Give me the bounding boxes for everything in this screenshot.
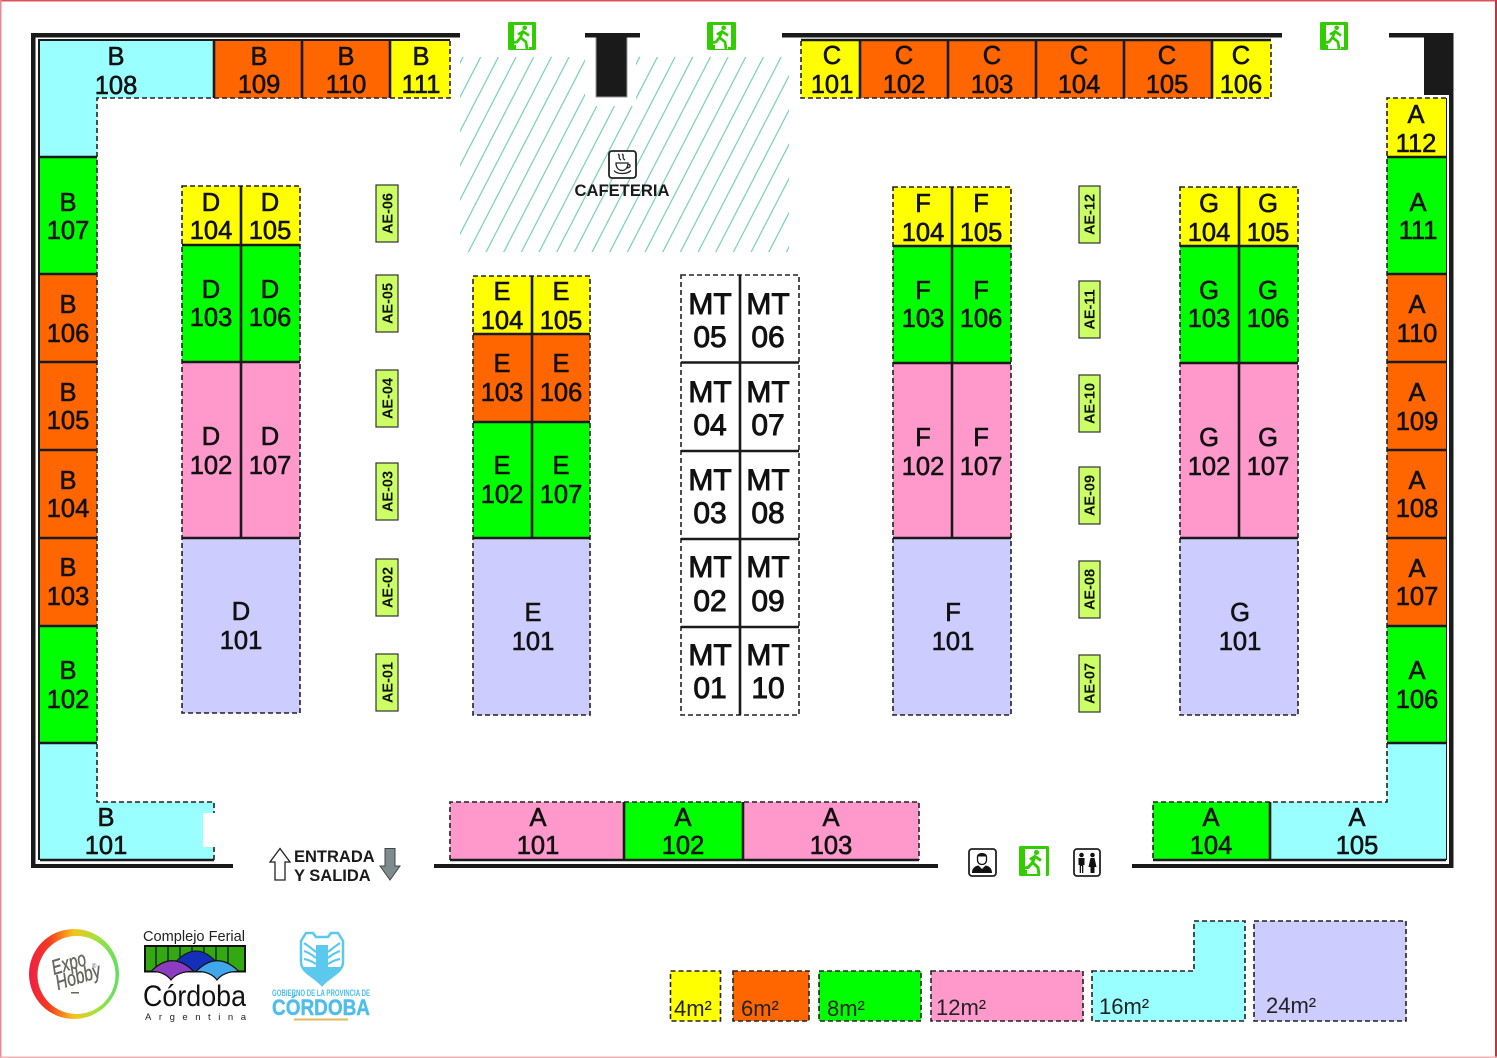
legend item 16m² [1092,921,1245,1021]
stall B104: B [59,467,77,495]
stalls MT 01 to MT 10: 03 [693,497,727,530]
stall E104: 104 [481,307,523,335]
stall B111 [390,41,450,99]
stall E105: 105 [540,307,582,335]
stall B107: B [59,189,77,217]
stall D104: D [202,189,220,217]
stalls MT 01 to MT 10: MT [688,639,732,672]
stand AE-10: AE-10 [1082,383,1098,424]
stall G102: G [1199,424,1219,452]
stall A101: 101 [517,832,559,860]
stall D101: D [232,598,250,626]
stall C101: C [823,42,841,70]
stall A111: 111 [1399,217,1437,245]
stall A102: A [674,804,692,832]
stall B103: 103 [47,583,89,611]
stand AE-02 [376,559,398,616]
legend item 4m² [670,971,720,1021]
stall A106: A [1408,657,1426,685]
stall C106: C [1232,42,1250,70]
stall F103: F [915,277,931,305]
stall B105 [40,362,97,450]
corner pillar [1424,33,1453,95]
stall C101: 101 [811,71,853,99]
stall B106: 106 [47,320,89,348]
label: cafeteria: CAFETERIA [575,181,669,200]
stalls MT 01 to MT 10: MT [746,376,790,409]
stalls MT 01 to MT 10: MT [746,464,790,497]
stall B102: B [59,657,77,685]
stall A109: A [1408,379,1426,407]
stand AE-12: AE-12 [1082,194,1098,235]
stall G106: 106 [1247,305,1289,333]
entrance label: ENTRADA [294,848,375,866]
logo: Gobierno de Córdoba [272,933,370,1020]
stand AE-01: AE-01 [380,662,396,703]
stall A101 [450,802,624,860]
stall G107 [1239,363,1298,538]
stalls MT 01 to MT 10: 05 [693,321,727,354]
stalls MT 01 to MT 10: MT [746,639,790,672]
stall C104 [1036,41,1124,99]
icon: down arrow [380,848,400,880]
stalls MT 01 to MT 10: 09 [751,585,785,618]
stall C103: C [983,42,1001,70]
stall D104: 104 [190,217,232,245]
stall A104: 104 [1190,832,1232,860]
stall F103 [893,246,952,363]
stall G107: 107 [1247,453,1289,481]
stall E102: 102 [481,481,523,509]
stall A108: A [1408,467,1426,495]
stall C106 [1212,41,1271,99]
stall B102 [40,626,97,743]
legend item 24m²: 24m² [1266,993,1316,1018]
stall B104: 104 [47,495,89,523]
stall G102: 102 [1188,453,1230,481]
entrance label: Y SALIDA [294,867,371,885]
stall B101: B [97,804,115,832]
stall D102 [182,362,241,538]
stalls MT 01 to MT 10: MT [688,376,732,409]
stall E103: E [493,350,511,378]
stall G104 [1180,187,1239,247]
logo: Gobierno de Córdoba: CÓRDOBA [272,995,370,1020]
stall C103: 103 [971,71,1013,99]
stall D104 [182,186,241,245]
stall E106: E [552,350,570,378]
stall F105: 105 [960,219,1002,247]
stalls MT 01 to MT 10: MT [688,464,732,497]
stand AE-10 [1079,375,1100,432]
stall F104 [893,187,952,247]
stall B109 [214,41,302,99]
stall F105 [952,187,1011,247]
stall A105 [1270,743,1446,860]
stalls MT 01 to MT 10: 08 [751,497,785,530]
stall A110 [1387,274,1446,362]
stall C106: 106 [1220,71,1262,99]
stall D107: D [261,423,279,451]
legend item 16m²: 16m² [1099,994,1149,1019]
stall B101 [40,743,214,860]
stall D102: 102 [190,452,232,480]
stall A112: 112 [1396,130,1436,158]
stall D106: D [261,276,279,304]
stall G106 [1239,246,1298,363]
logo: Complejo Ferial Córdoba: Complejo Ferial [143,928,245,945]
stand AE-09: AE-09 [1082,475,1098,516]
stall D106 [241,245,300,362]
stall E104 [473,276,532,335]
legend item 6m²: 6m² [741,996,779,1021]
stall C105: 105 [1146,71,1188,99]
stand AE-11 [1079,281,1100,338]
stall A106 [1387,626,1446,743]
stall A105: 105 [1336,832,1378,860]
block E outlines [473,276,590,715]
entrance and exit sign [270,848,400,885]
stall E103: 103 [481,379,523,407]
stall A104 [1153,802,1270,860]
stalls MT 01 to MT 10: MT [688,288,732,321]
entrance label [294,848,375,885]
stand AE-02: AE-02 [380,567,396,608]
stall G103: G [1199,277,1219,305]
stalls MT 01 to MT 10: 10 [751,672,785,705]
stall F102: 102 [902,453,944,481]
stall F104: 104 [902,219,944,247]
stall A103: 103 [810,832,852,860]
stalls MT 01 to MT 10: 01 [693,672,727,705]
stall A107: 107 [1396,583,1438,611]
stand AE-06 [376,185,398,242]
block G outlines [1180,187,1298,715]
stand AE-05: AE-05 [380,283,396,324]
stall F103: 103 [902,305,944,333]
stall G103: 103 [1188,305,1230,333]
stall E105 [532,276,590,335]
stall A110: A [1408,291,1426,319]
stall B109: 109 [238,71,280,99]
logo: Gobierno de Córdoba: GOBIERNO DE LA PROVINCIA DE [272,988,370,999]
stalls MT 01 to MT 10: MT [746,551,790,584]
stall G102 [1180,363,1239,538]
stall B107 [40,157,97,274]
stall G101 [1180,538,1298,715]
stall F105: F [973,190,989,218]
icon: emergency exit left [508,22,536,50]
stall G103 [1180,246,1239,363]
stall G104: G [1199,190,1219,218]
stalls MT 01 to MT 10 [681,275,799,715]
stall D103: D [202,276,220,304]
stall D103 [182,245,241,362]
stall G101: G [1230,599,1250,627]
stall F102 [893,363,952,538]
stall B108 [40,41,214,157]
stall A112: A [1407,101,1425,129]
stall D107: 107 [249,452,291,480]
legend item 6m² [733,971,809,1021]
stall A108 [1387,450,1446,538]
stall B110: 110 [326,71,366,99]
logo: Expo Hobby: Hobby [53,959,105,995]
stall F107: F [973,424,989,452]
stall E103 [473,334,532,422]
stall F107: 107 [960,453,1002,481]
stalls MT 01 to MT 10: 04 [693,409,727,442]
stall A106: 106 [1396,686,1438,714]
icon: emergency exit right [1320,22,1348,50]
stall E101: 101 [512,628,554,656]
stall A103 [743,802,919,860]
stall B103 [40,538,97,626]
stall C102: 102 [883,71,925,99]
stall A107: A [1408,555,1426,583]
block F outlines [893,187,1011,715]
stall A105: A [1348,804,1366,832]
stall A107 [1387,538,1446,626]
stand AE-08 [1079,561,1100,618]
stall B101: 101 [85,832,127,860]
logo: Complejo Ferial Córdoba [143,928,247,1023]
stand AE-05 [376,275,398,332]
stall F107 [952,363,1011,538]
stall F106: F [973,277,989,305]
stall B111: B [412,43,430,71]
stall E107 [532,422,590,538]
stall B109: B [250,43,268,71]
icon: up arrow [270,848,290,880]
outer walls [31,33,1454,868]
icon: medical service [969,849,996,876]
legend item 4m²: 4m² [674,996,712,1021]
stall G104: 104 [1188,219,1230,247]
stand AE-07: AE-07 [1082,663,1098,704]
stall F106 [952,246,1011,363]
stall F106: 106 [960,305,1002,333]
stall B106 [40,274,97,362]
legend [670,921,1406,1021]
stall B105: 105 [47,407,89,435]
stall B104 [40,450,97,538]
legend item 12m²: 12m² [936,995,986,1020]
stall A103: A [822,804,840,832]
stall D103: 103 [190,304,232,332]
stall B108: 108 [95,72,137,100]
stall B107: 107 [47,217,89,245]
stall B106: B [59,291,77,319]
stall F101: F [945,599,961,627]
logo: Complejo Ferial Córdoba: Córdoba [143,980,246,1013]
stall E102: E [493,452,511,480]
cafeteria hatched area [460,50,789,252]
stall E101: E [524,599,542,627]
stand AE-06: AE-06 [380,193,396,234]
stall B110: B [337,43,355,71]
icon: emergency exit bottom [1019,846,1049,876]
stand AE-09 [1079,467,1100,524]
legend item 8m² [819,971,921,1021]
icon: restrooms [1074,849,1100,876]
stall A108: 108 [1396,495,1438,523]
stalls MT 01 to MT 10: 06 [751,321,785,354]
stall A110: 110 [1397,320,1437,348]
stand AE-04: AE-04 [380,378,396,419]
stall G105 [1239,187,1298,247]
central pillar [585,33,640,97]
stall A109 [1387,362,1446,450]
stall E107: E [552,452,570,480]
stall G105: 105 [1247,219,1289,247]
stall A102 [624,802,743,860]
stall A104: A [1202,804,1220,832]
stall D107 [241,362,300,538]
stall C105 [1124,41,1212,99]
stand AE-03 [376,463,398,520]
stall E102 [473,422,532,538]
stall F101: 101 [932,628,974,656]
stall B108: B [107,43,125,71]
stand AE-03: AE-03 [380,471,396,512]
stall A101: A [529,804,547,832]
legend item 8m²: 8m² [827,996,865,1021]
stall G106: G [1258,277,1278,305]
stall D101: 101 [220,627,262,655]
stall B111: 111 [402,71,440,99]
stand AE-07 [1079,655,1100,712]
stall B102: 102 [47,686,89,714]
block D outlines [182,186,300,713]
stall D102: D [202,423,220,451]
stall C102: C [895,42,913,70]
stall E104: E [493,278,511,306]
stall E107: 107 [540,481,582,509]
stall C102 [860,41,948,99]
logo: Expo Hobby: ® [92,963,97,970]
stalls MT 01 to MT 10: 07 [751,409,785,442]
stand AE-04 [376,370,398,427]
stall F104: F [915,190,931,218]
logo: Expo Hobby: Expo [49,947,89,980]
logo: Expo Hobby [29,929,119,1019]
stall G101: 101 [1219,628,1261,656]
stall C101 [801,41,860,99]
stall F101 [893,538,1011,715]
stall E106 [532,334,590,422]
stall D106: 106 [249,304,291,332]
stall D105 [241,186,300,245]
stall A111: A [1409,189,1427,217]
stall F102: F [915,424,931,452]
stall G105: G [1258,190,1278,218]
stall B103: B [59,554,77,582]
stall E106: 106 [540,379,582,407]
stall E105: E [552,278,570,306]
stand AE-08: AE-08 [1082,569,1098,610]
stand AE-11: AE-11 [1082,289,1098,330]
stalls MT 01 to MT 10: 02 [693,585,727,618]
stall G107: G [1258,424,1278,452]
stalls MT 01 to MT 10: MT [688,551,732,584]
stall D105: D [261,189,279,217]
stall A112 [1387,98,1446,158]
stalls MT 01 to MT 10: MT [746,288,790,321]
stand AE-12 [1079,186,1100,243]
legend item 12m² [931,971,1083,1021]
logo: Complejo Ferial Córdoba: Argentina [145,1012,247,1023]
stall A111 [1387,157,1446,274]
stall B110 [302,41,390,99]
stall D101 [182,538,300,713]
stall A102: 102 [662,832,704,860]
stall D105: 105 [249,217,291,245]
stall B105: B [59,379,77,407]
stand AE-01 [376,654,398,711]
perimeter stall outlines [40,40,1446,860]
legend item 24m² [1254,921,1406,1021]
stall C105: C [1158,42,1176,70]
stall C103 [948,41,1036,99]
stall E101 [473,538,590,715]
icon: coffee cup [609,151,636,178]
stall A109: 109 [1396,408,1438,436]
stall C104: 104 [1058,71,1100,99]
stall C104: C [1070,42,1088,70]
icon: emergency exit centre [707,22,736,50]
